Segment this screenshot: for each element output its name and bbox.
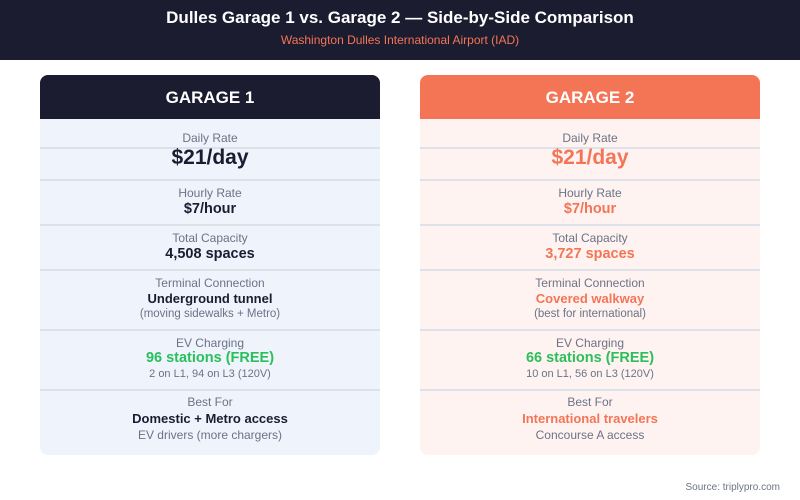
panel: garage 1: EV drivers (more chargers) [138, 428, 282, 442]
daily rate: Daily Rate [182, 131, 238, 145]
title: Dulles Garage 1 vs. Garage 2 — Side-by-Side Comparison [166, 8, 634, 27]
panel: garage 1: Underground tunnel [148, 291, 272, 306]
terminal connection: Terminal Connection [535, 276, 645, 290]
header bar [0, 0, 800, 60]
EV charging: EV Charging [556, 336, 624, 350]
garage 1 heading [40, 75, 380, 119]
EV charging: EV Charging [176, 336, 244, 350]
panel: garage 1: 96 stations (FREE) [146, 350, 274, 366]
hourly rate: Hourly Rate [558, 186, 622, 200]
source: Source: triplypro.com [686, 482, 780, 493]
capacity: Total Capacity [552, 231, 628, 245]
panel: garage 2: (best for international) [534, 308, 646, 320]
daily rate: Daily Rate [562, 131, 618, 145]
panel: garage 2: 66 stations (FREE) [526, 350, 654, 366]
panel: garage 2 [420, 75, 760, 455]
panel: garage 1 [40, 75, 380, 455]
garage 2 heading: GARAGE 2 [546, 88, 634, 107]
panel: garage 2: $7/hour [564, 201, 616, 217]
hourly rate: Hourly Rate [178, 186, 242, 200]
capacity: Total Capacity [172, 231, 248, 245]
panel: garage 1: 2 on L1, 94 on L3 (120V) [149, 368, 271, 380]
panel: garage 1: Domestic + Metro access [132, 411, 288, 426]
terminal connection: Terminal Connection [155, 276, 265, 290]
panel: garage 1: $21/day [171, 146, 249, 169]
panel: garage 2: 3,727 spaces [545, 246, 635, 262]
panel: garage 1: $7/hour [184, 201, 236, 217]
garage 1 heading: GARAGE 1 [166, 88, 254, 107]
panel: garage 2: Covered walkway [536, 291, 644, 306]
best for: Best For [187, 395, 233, 409]
garage 2 heading [420, 75, 760, 119]
panel: garage 1: (moving sidewalks + Metro) [140, 308, 280, 320]
panel: garage 2: 10 on L1, 56 on L3 (120V) [526, 368, 654, 380]
panel: garage 2: $21/day [551, 146, 629, 169]
panel: garage 2: International travelers [522, 411, 658, 426]
panel: garage 2: Concourse A access [536, 428, 644, 442]
panel: garage 1: 4,508 spaces [165, 246, 255, 262]
best for: Best For [567, 395, 613, 409]
subtitle: Washington Dulles International Airport (IAD) [281, 33, 519, 47]
